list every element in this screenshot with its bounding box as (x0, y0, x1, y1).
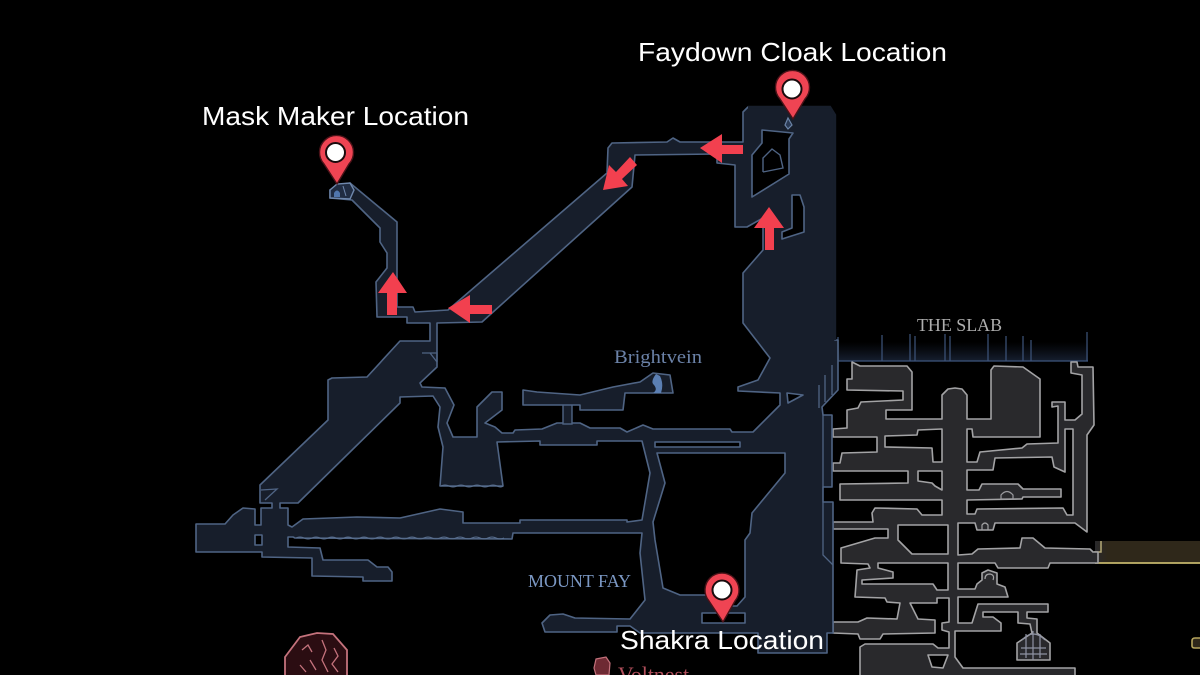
label: Faydown Cloak Location: Faydown Cloak Location (638, 37, 947, 67)
icon: round shrine marker (1020, 631, 1047, 660)
map: Mount Fay region (196, 107, 838, 653)
arrow: left from the shaft (700, 134, 743, 163)
wavy floor: long west corridor and lower chamber (296, 485, 504, 539)
icon: Mask Maker shrine (330, 183, 354, 199)
icon: arch inside upper room (763, 149, 783, 172)
icon: lantern above upper room (785, 118, 792, 129)
icon: Voltnest (594, 657, 610, 675)
label: Shakra Location: Shakra Location (620, 625, 824, 655)
arrow: up to Mask Maker (378, 272, 407, 315)
edge: soft top and right of the tall shaft (748, 107, 835, 340)
label: Voltnest with icon (594, 657, 689, 675)
map: red brain-shaped room (285, 633, 347, 675)
map: The Slab region (833, 315, 1200, 675)
pin: Faydown Cloak (775, 70, 810, 119)
pin: Mask Maker (320, 135, 354, 184)
label: Mount Fay: MOUNT FAY (528, 571, 631, 591)
arrow: left along lower junction (448, 295, 492, 323)
arrow: diagonal down-left (603, 157, 637, 190)
pin: Shakra (705, 573, 739, 622)
icon: bench marker (1001, 492, 1013, 499)
room: Brightvein bench area (523, 373, 673, 424)
icon: small arch (982, 523, 988, 530)
corridors: The Slab tunnel network (833, 362, 1098, 675)
label: Mask Maker Location: Mask Maker Location (202, 101, 469, 131)
label: The Slab: THE SLAB (917, 315, 1002, 335)
corridors: main Mount Fay cave outline (196, 107, 838, 653)
label: Brightvein: Brightvein (614, 347, 703, 368)
icon: swirl in tunnel (985, 574, 994, 580)
wall marks: junction ledges (261, 353, 437, 500)
strip: top boundary of The Slab (838, 332, 1088, 361)
wall marks: lower shaft east wall (819, 365, 833, 565)
corridor: gold passage to the east (1094, 541, 1200, 648)
arrow: up the shaft (754, 207, 784, 250)
